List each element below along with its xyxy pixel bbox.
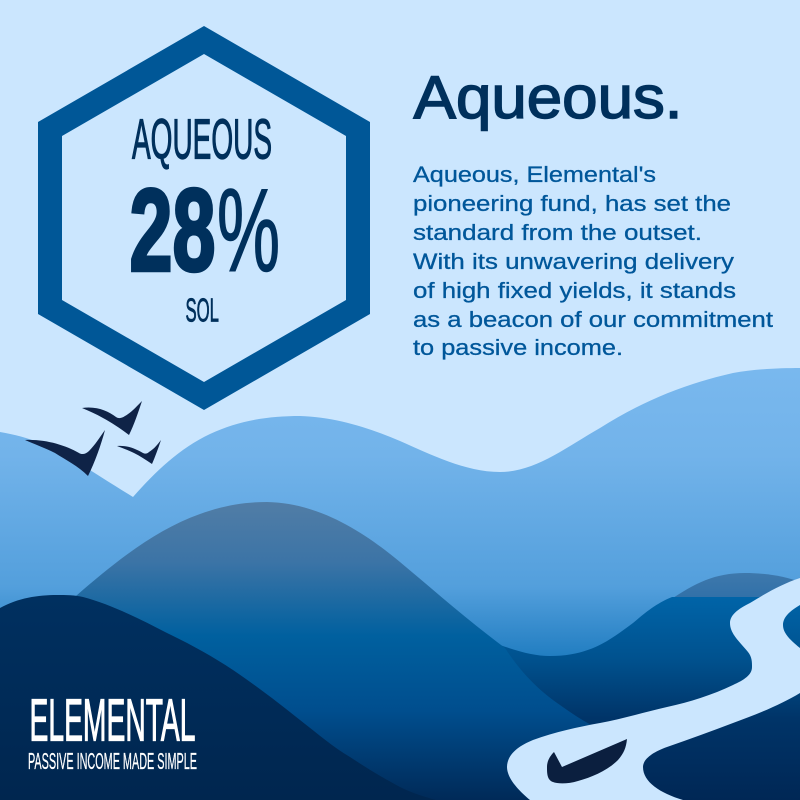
text: PASSIVE INCOME MADE SIMPLE	[28, 748, 197, 774]
body text	[413, 162, 774, 360]
heading: Aqueous.	[414, 64, 682, 131]
body text: Aqueous, Elemental's	[413, 162, 656, 187]
hexagon badge: AQUEOUS	[132, 108, 272, 172]
badge value: percent sign: %	[217, 165, 280, 297]
text: ELEMENTAL	[30, 688, 196, 754]
icon: birds	[25, 401, 161, 476]
body text: standard from the outset.	[413, 220, 702, 245]
hill: central mountain	[40, 502, 620, 800]
wave: light blue hills	[0, 368, 800, 800]
body text: of high fixed yields, it stands	[413, 278, 736, 303]
hill: back right	[670, 573, 800, 620]
hill: right foreground	[400, 597, 800, 800]
icon: large bird	[25, 430, 105, 476]
icon: upper bird	[82, 401, 142, 435]
river	[507, 578, 800, 800]
body text: as a beacon of our commitment	[413, 307, 774, 332]
hexagon badge: SOL	[186, 292, 219, 330]
body text: pioneering fund, has set the	[413, 191, 731, 216]
body text: to passive income.	[413, 335, 623, 360]
icon: boat	[547, 739, 627, 783]
logo	[28, 688, 197, 774]
landscape	[0, 368, 800, 800]
icon: small bird	[117, 440, 161, 464]
hill: dark front	[0, 595, 436, 800]
hexagon badge	[38, 26, 370, 410]
body text: With its unwavering delivery	[413, 249, 735, 274]
badge value: 28: 28	[130, 164, 216, 296]
